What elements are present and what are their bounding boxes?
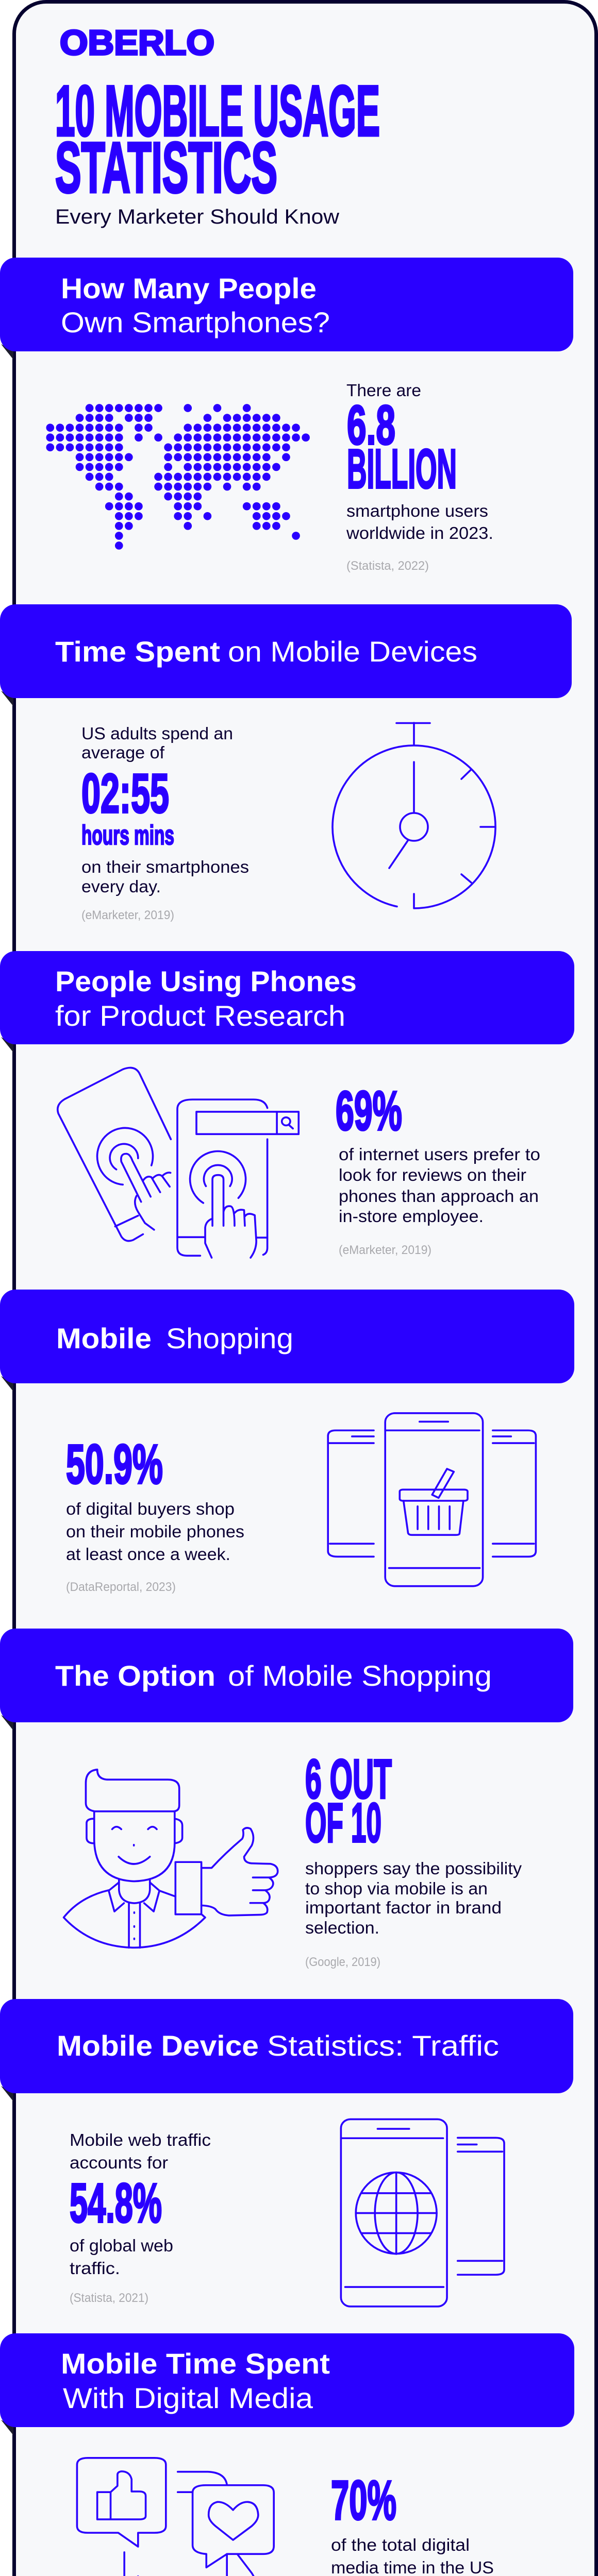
stat: 54.8%: accounts for — [70, 2153, 168, 2172]
stat: 6.8 billion: BILLION — [347, 437, 457, 500]
section: option of mobile shopping — [64, 1748, 522, 1969]
stat: 69%: in-store employee. — [339, 1207, 484, 1226]
stat: 69%: of internet users prefer to — [339, 1145, 540, 1164]
stat: 6 out of 10: (Google, 2019) — [305, 1955, 380, 1969]
stat: 02:55 hours: on their smartphones — [81, 857, 249, 876]
stat: 70%: of the total digital — [331, 2535, 470, 2554]
banner: people using phones for product research: People Using Phones — [55, 965, 357, 997]
title — [55, 71, 380, 208]
stat: 02:55 hours: every day. — [81, 877, 161, 896]
stat: 69%: phones than approach an — [339, 1187, 539, 1206]
stat: 69%: look for reviews on their — [339, 1165, 526, 1184]
stat: 02:55 hours: 02:55 — [81, 762, 169, 824]
icon: social speech bubbles and hand — [77, 2458, 274, 2576]
banner: mobile device statistics traffic — [0, 1999, 573, 2102]
banner: how many people own smartphones — [0, 258, 573, 360]
stat: 6.8 billion: (Statista, 2022) — [346, 559, 429, 573]
stat: 6.8 billion — [346, 381, 493, 573]
stat: 6 out of 10: 6 OUT — [305, 1748, 392, 1810]
stat: 70% — [331, 2469, 494, 2576]
banner: the option of mobile shopping: of Mobile Shopping — [228, 1659, 492, 1692]
icon: man with thumbs up — [64, 1770, 278, 1947]
section: digital media — [77, 2458, 494, 2576]
stat: 6.8 billion: 6.8 — [347, 394, 395, 456]
banner: how many people own smartphones: How Many People — [61, 272, 317, 304]
stat: 02:55 hours: (eMarketer, 2019) — [81, 908, 174, 922]
icon: phones with shopping basket — [328, 1413, 536, 1586]
stat: 54.8%: 54.8% — [70, 2172, 162, 2234]
section: time spent — [81, 723, 495, 922]
section: mobile traffic — [70, 2119, 504, 2307]
stat: 6 out of 10: important factor in brand — [305, 1898, 502, 1917]
title: STATISTICS — [55, 128, 277, 208]
stat: 6 out of 10: to shop via mobile is an — [305, 1879, 488, 1898]
stat: 54.8%: (Statista, 2021) — [70, 2291, 148, 2305]
stat: 50.9%: 50.9% — [66, 1433, 163, 1495]
stat: 6.8 billion: There are — [346, 381, 421, 400]
stat: 54.8% — [70, 2130, 211, 2305]
banner: time spent on mobile devices: on Mobile Devices — [228, 635, 477, 668]
icon: dotted world map — [50, 408, 306, 546]
stat: 50.9%: at least once a week. — [66, 1545, 230, 1564]
stat: 02:55 hours: US adults spend an — [81, 724, 233, 743]
banner: how many people own smartphones: Own Smartphones? — [61, 306, 330, 338]
stat: 69% — [336, 1079, 540, 1257]
stat: 6.8 billion: smartphone users — [346, 501, 488, 520]
banner: mobile device statistics traffic: Mobile Device — [57, 2029, 259, 2062]
section: mobile shopping — [66, 1413, 536, 1594]
banner: people using phones for product research — [0, 951, 574, 1053]
stat: 02:55 hours: hours mins — [81, 820, 174, 851]
subtitle: Every Marketer Should Know — [55, 206, 339, 228]
stat: 69%: (eMarketer, 2019) — [339, 1243, 431, 1257]
stat: 6 out of 10: selection. — [305, 1918, 379, 1937]
stat: 02:55 hours — [81, 724, 249, 922]
stat: 02:55 hours: average of — [81, 743, 165, 762]
stat: 6 out of 10 — [305, 1748, 522, 1969]
stat: 50.9%: of digital buyers shop — [66, 1499, 235, 1518]
icon: phones with globe — [341, 2119, 504, 2307]
banner: the option of mobile shopping — [0, 1629, 573, 1731]
banner: mobile shopping: Mobile — [56, 1322, 152, 1354]
banner: the option of mobile shopping: The Option — [55, 1659, 215, 1692]
banner: mobile time spent with digital media — [0, 2333, 574, 2435]
banner: mobile time spent with digital media: Mobile Time Spent — [61, 2347, 330, 2380]
stat: 50.9%: on their mobile phones — [66, 1522, 244, 1541]
banner: people using phones for product research: for Product Research — [55, 999, 345, 1032]
banner: time spent on mobile devices: Time Spent — [55, 635, 220, 668]
stat: 54.8%: Mobile web traffic — [70, 2130, 211, 2149]
stat: 6.8 billion: worldwide in 2023. — [346, 523, 493, 543]
stat: 54.8%: traffic. — [70, 2259, 120, 2278]
banner: mobile shopping: Shopping — [166, 1322, 293, 1354]
stat: 6 out of 10: shoppers say the possibility — [305, 1859, 522, 1878]
section: smartphone users — [50, 381, 493, 573]
banner: mobile device statistics traffic: Statistics: Traffic — [267, 2029, 499, 2062]
stat: 50.9%: (DataReportal, 2023) — [66, 1580, 176, 1594]
icon: stopwatch — [333, 723, 495, 908]
icon: phones with tapping hands — [58, 1067, 298, 1258]
stat: 70%: 70% — [331, 2469, 396, 2531]
stat: 6 out of 10: OF 10 — [305, 1791, 381, 1854]
banner: time spent on mobile devices — [0, 604, 572, 706]
logo: Oberlo: OBERLO — [60, 23, 214, 62]
stat: 69%: 69% — [336, 1079, 402, 1142]
section: product research — [58, 1067, 540, 1258]
stat: 54.8%: of global web — [70, 2236, 173, 2255]
banner: mobile time spent with digital media: With Digital Media — [63, 2382, 313, 2414]
banner: mobile shopping — [0, 1290, 574, 1392]
stat: 50.9% — [66, 1433, 244, 1594]
